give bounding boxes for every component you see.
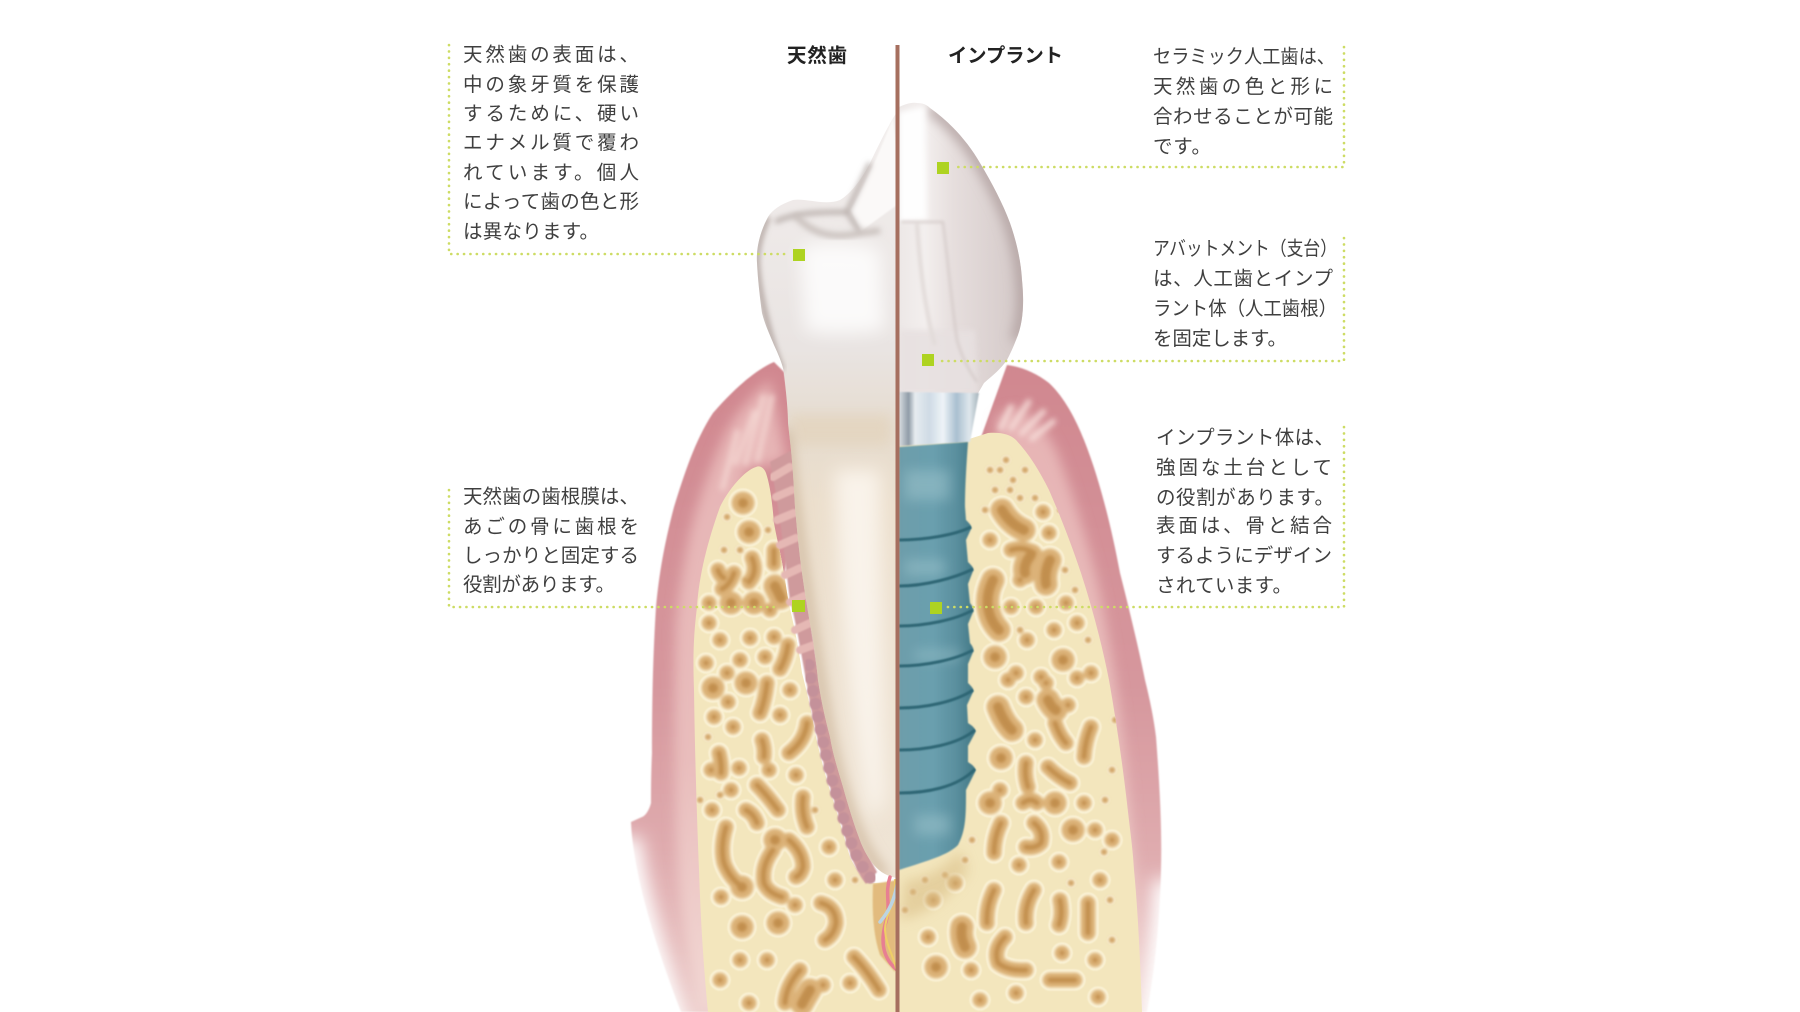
callout: abutment: は、人工歯とインプ <box>1153 268 1333 290</box>
callout: enamel: れています。個人 <box>463 162 639 184</box>
heading: implant: インプラント <box>948 45 1063 67</box>
callout: implant body: されています。 <box>1156 575 1292 597</box>
callout: enamel <box>449 44 805 261</box>
callout: implant body: するようにデザイン <box>1156 545 1332 567</box>
callout: abutment: を固定します。 <box>1153 328 1287 350</box>
callout: implant body: 強固な土台として <box>1156 457 1332 479</box>
callout: ceramic crown <box>937 46 1344 174</box>
callout: ceramic crown: 合わせることが可能 <box>1153 106 1333 128</box>
callout: periodontal ligament <box>449 486 805 612</box>
gum: implant side <box>980 365 1166 1012</box>
callout: abutment: ラント体（人工歯根） <box>1153 298 1337 320</box>
alveolar bone with cancellous pores <box>680 420 1160 1012</box>
callout: enamel: は異なります。 <box>463 221 599 243</box>
callout: ceramic crown: です。 <box>1153 136 1211 158</box>
callout: implant body: インプラント体は、 <box>1156 427 1334 449</box>
callout: periodontal ligament: 役割があります。 <box>463 574 615 596</box>
illustration: tooth and implant cross-section <box>628 45 1166 1012</box>
callout: ceramic crown: 天然歯の色と形に <box>1153 76 1333 98</box>
callout: enamel: によって歯の色と形 <box>463 191 639 213</box>
callout: periodontal ligament: 天然歯の歯根膜は、 <box>463 486 639 508</box>
abutment outline <box>901 222 977 382</box>
callout: periodontal ligament: しっかりと固定する <box>463 545 639 567</box>
nerve and blood vessels <box>873 877 897 972</box>
natural tooth <box>757 112 897 880</box>
heading: natural tooth: 天然歯 <box>787 44 847 67</box>
implant collar <box>899 392 979 446</box>
callout: abutment <box>922 238 1344 366</box>
callout: implant body <box>930 427 1344 614</box>
implant body with threads <box>899 442 975 870</box>
callout: enamel: 天然歯の表面は、 <box>463 44 639 66</box>
callout: implant body: の役割があります。 <box>1156 487 1334 509</box>
periodontal ligament <box>770 450 877 884</box>
centre divider line <box>896 45 900 1012</box>
callout: enamel: するために、硬い <box>463 103 639 125</box>
callout: ceramic crown: セラミック人工歯は、 <box>1153 46 1335 68</box>
callout: enamel: エナメル質で覆わ <box>463 132 639 154</box>
callout: abutment: アバットメント（支台） <box>1153 238 1337 260</box>
gum: natural tooth side <box>628 362 800 1012</box>
callout: enamel: 中の象牙質を保護 <box>463 74 639 96</box>
callout: periodontal ligament: あごの骨に歯根を <box>463 516 639 538</box>
callout: implant body: 表面は、骨と結合 <box>1156 515 1332 537</box>
ceramic crown <box>897 103 1023 395</box>
infographic: natural tooth vs implant <box>448 44 1346 1012</box>
tooth cusp detail <box>775 118 897 236</box>
